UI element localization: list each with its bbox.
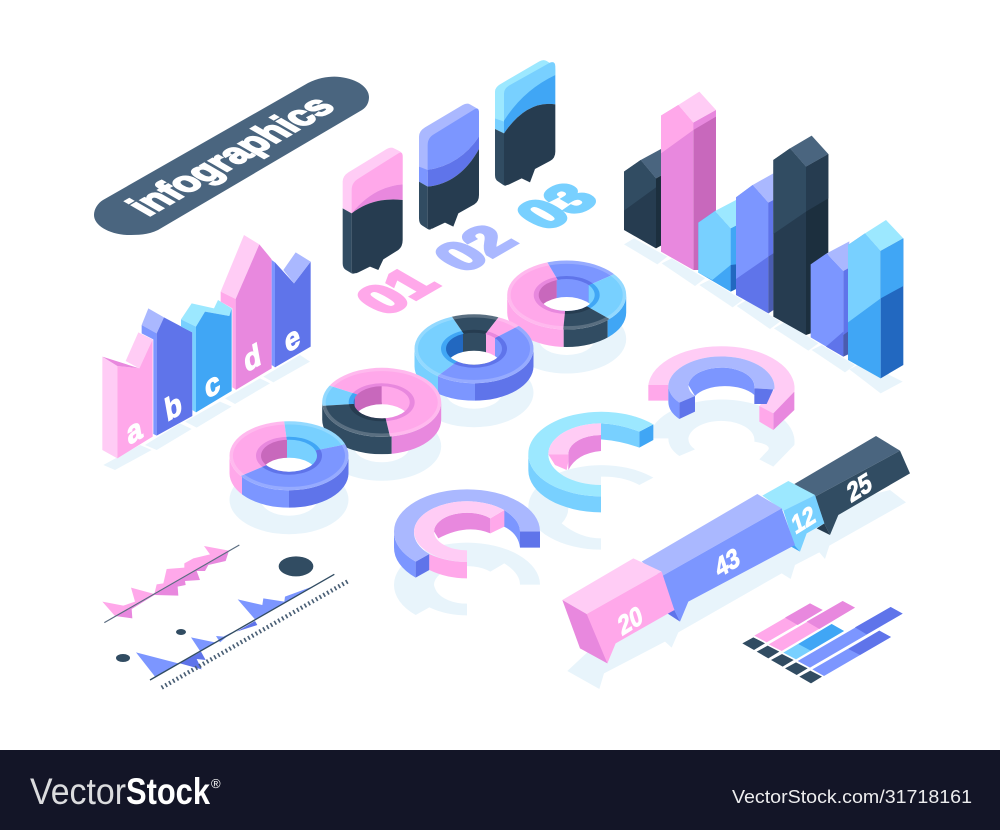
letter a: a (124, 411, 145, 452)
column 2 pink (661, 92, 716, 270)
donut shadows (229, 304, 626, 534)
pink area chart (102, 545, 239, 623)
letter b: b (162, 387, 184, 429)
panel: lettered bars a to e (102, 235, 311, 470)
value 20: 20 (615, 600, 646, 642)
letter d: d (241, 338, 263, 380)
dot large (279, 556, 313, 576)
panel: segmented arrow bar (562, 436, 910, 689)
panel: numbered speech tags (342, 60, 611, 324)
footer logo: Vector (30, 771, 126, 812)
footer url: VectorStock.com/31718161 (732, 787, 972, 807)
tag 03 (495, 60, 555, 186)
column 6 periwinkle (811, 241, 849, 357)
footer logo: ® (211, 776, 221, 791)
value 12: 12 (789, 500, 819, 541)
letter e: e (282, 319, 302, 360)
mini horizontal bar chart (742, 601, 903, 683)
donut chart 4 (507, 260, 626, 347)
title pill: infographics (118, 90, 345, 222)
footer logo: Stock (126, 771, 210, 812)
donut chart 3 (414, 314, 534, 401)
segment periwinkle 43 (642, 494, 795, 622)
number 01: 01 (342, 260, 451, 324)
dot small (176, 629, 186, 635)
value 43: 43 (712, 542, 743, 584)
footer logo (30, 771, 221, 812)
column 4 periwinkle (736, 173, 773, 313)
value 25: 25 (844, 467, 875, 509)
segment pink 20 (562, 558, 674, 663)
tag 01 (343, 148, 403, 274)
periwinkle area chart (136, 574, 334, 680)
donut chart 2 (322, 368, 442, 454)
footer bar (0, 750, 1000, 830)
segment navy 25 (794, 436, 910, 535)
dot medium (116, 654, 130, 662)
column 7 sky (848, 220, 903, 378)
tick ruler (162, 581, 348, 688)
partial ring A pink and periwinkle (648, 346, 795, 467)
number 03: 03 (502, 175, 611, 239)
letter c: c (202, 365, 222, 406)
partial ring C periwinkle and pink (394, 489, 540, 615)
column 5 navy tall (773, 136, 828, 335)
donut chart 1 (230, 421, 348, 508)
panel: line area charts (102, 545, 348, 688)
column 3 sky (698, 200, 736, 292)
number 02: 02 (420, 217, 529, 281)
panel: isometric column chart (624, 92, 903, 393)
column 1 navy (624, 149, 661, 248)
partial ring B sky and pink (528, 412, 653, 550)
segment sky 12 (762, 481, 824, 552)
tag 02 (419, 104, 479, 230)
